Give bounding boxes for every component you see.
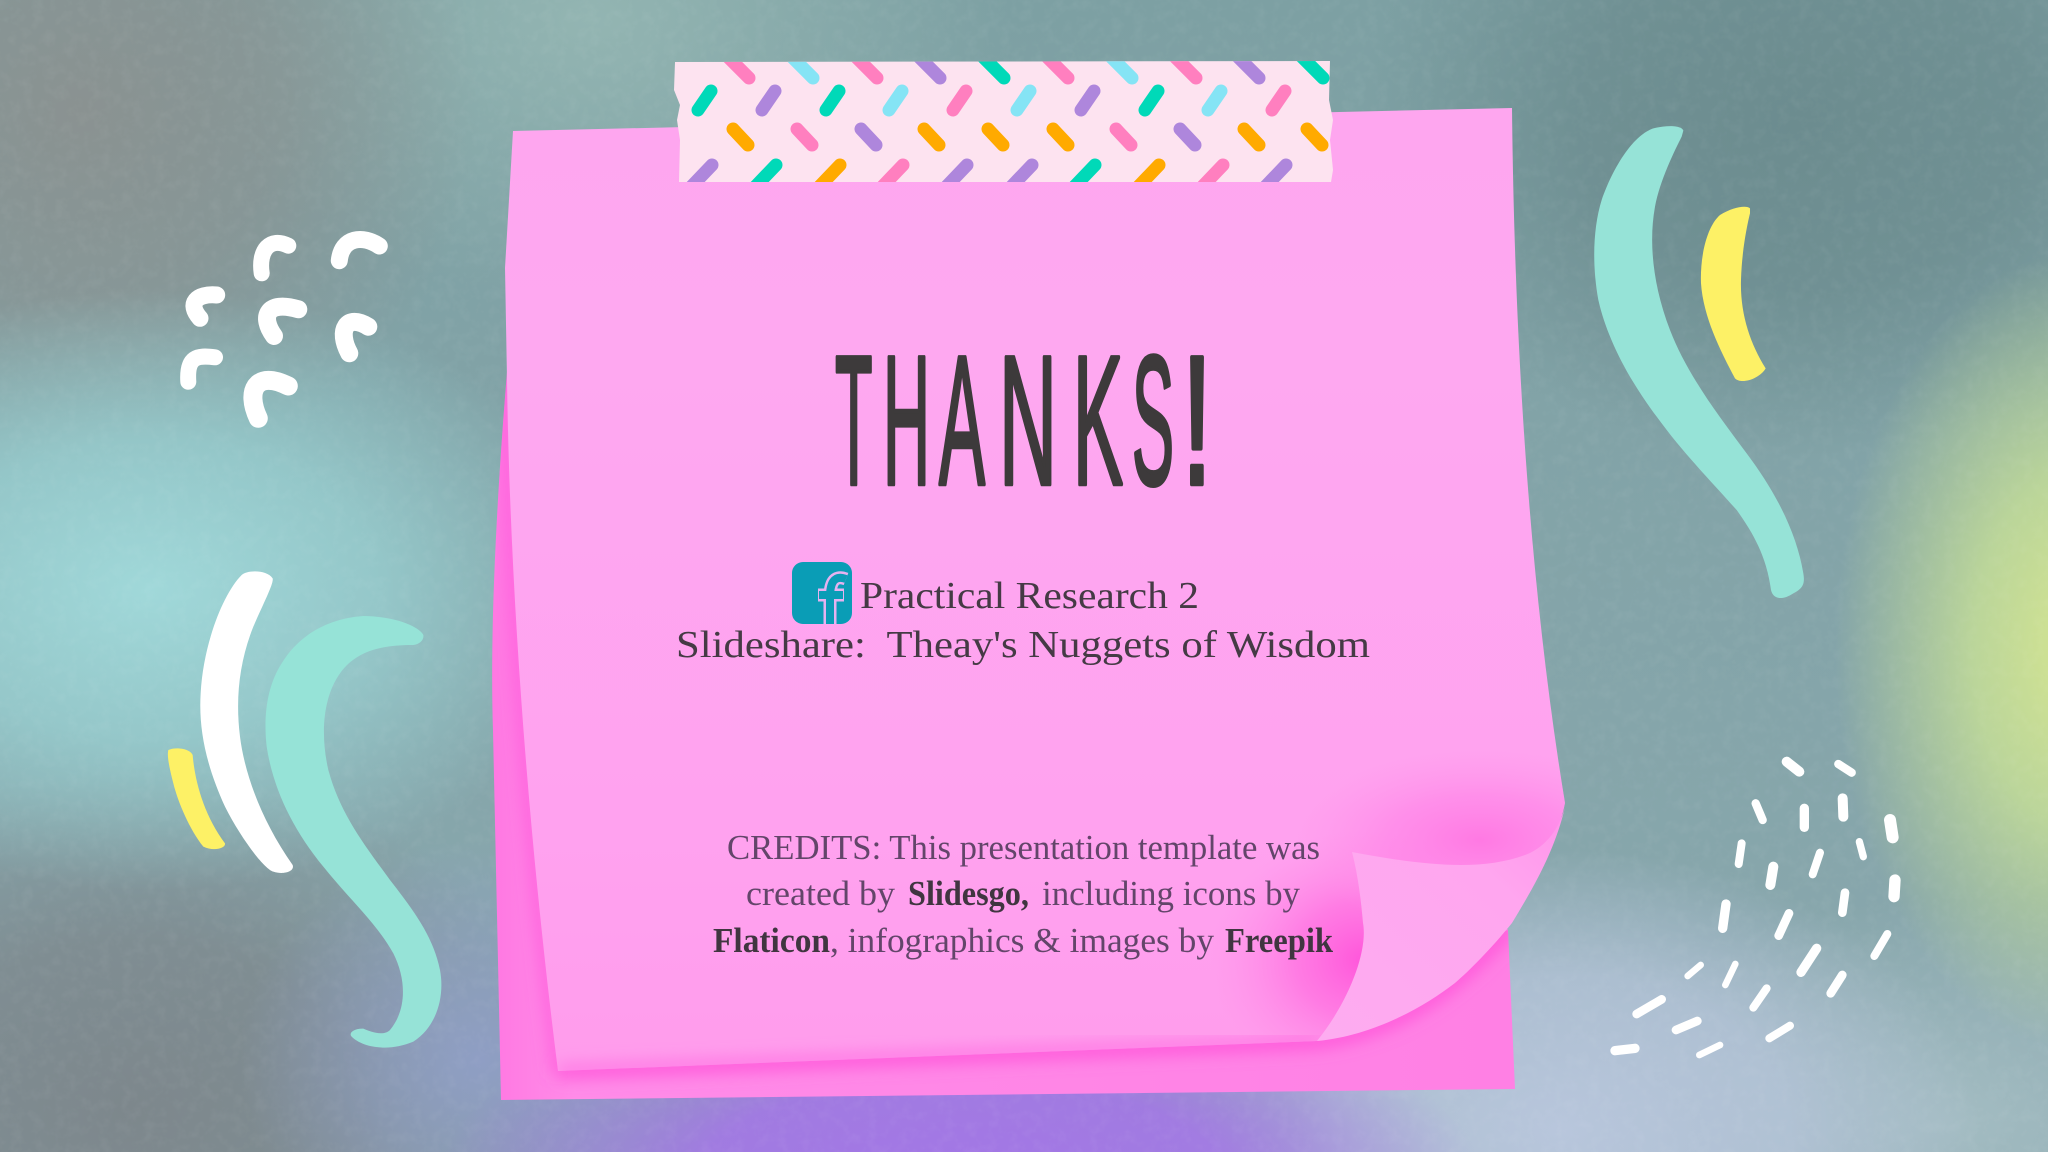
curled corner (1317, 807, 1565, 1041)
right swirl decoration (1594, 126, 1804, 598)
text: credits: Freepik (1225, 921, 1333, 960)
title (835, 317, 1213, 523)
title: A (939, 317, 985, 523)
title: T (835, 317, 872, 523)
white rice grain cluster (1615, 762, 1895, 1055)
text: practical research: Practical Research 2 (860, 575, 1199, 617)
text: credits: Flaticon (713, 921, 830, 960)
text: slideshare: Slideshare: Theay's Nuggets of Wisdom (676, 624, 1370, 666)
sticky note (492, 108, 1665, 1100)
text: credits: Slidesgo, (908, 874, 1029, 913)
title: H (883, 317, 930, 523)
left swirl decoration (168, 571, 441, 1048)
title: K (1073, 317, 1123, 523)
text: credits: CREDITS: This presentation template was (727, 828, 1320, 867)
back sheet (492, 372, 1515, 1100)
washi tape with sprinkles (670, 56, 1338, 188)
front sheet (505, 108, 1565, 1071)
white hooks cluster (188, 239, 379, 418)
text: credits: created by (746, 874, 896, 913)
text: credits: , infographics & images by (830, 921, 1215, 960)
title: ! (1181, 317, 1213, 523)
text: credits (713, 828, 1333, 960)
icon: facebook (792, 562, 852, 624)
title: S (1132, 317, 1174, 523)
text: credits: including icons by (1042, 874, 1300, 913)
title: N (999, 317, 1057, 523)
